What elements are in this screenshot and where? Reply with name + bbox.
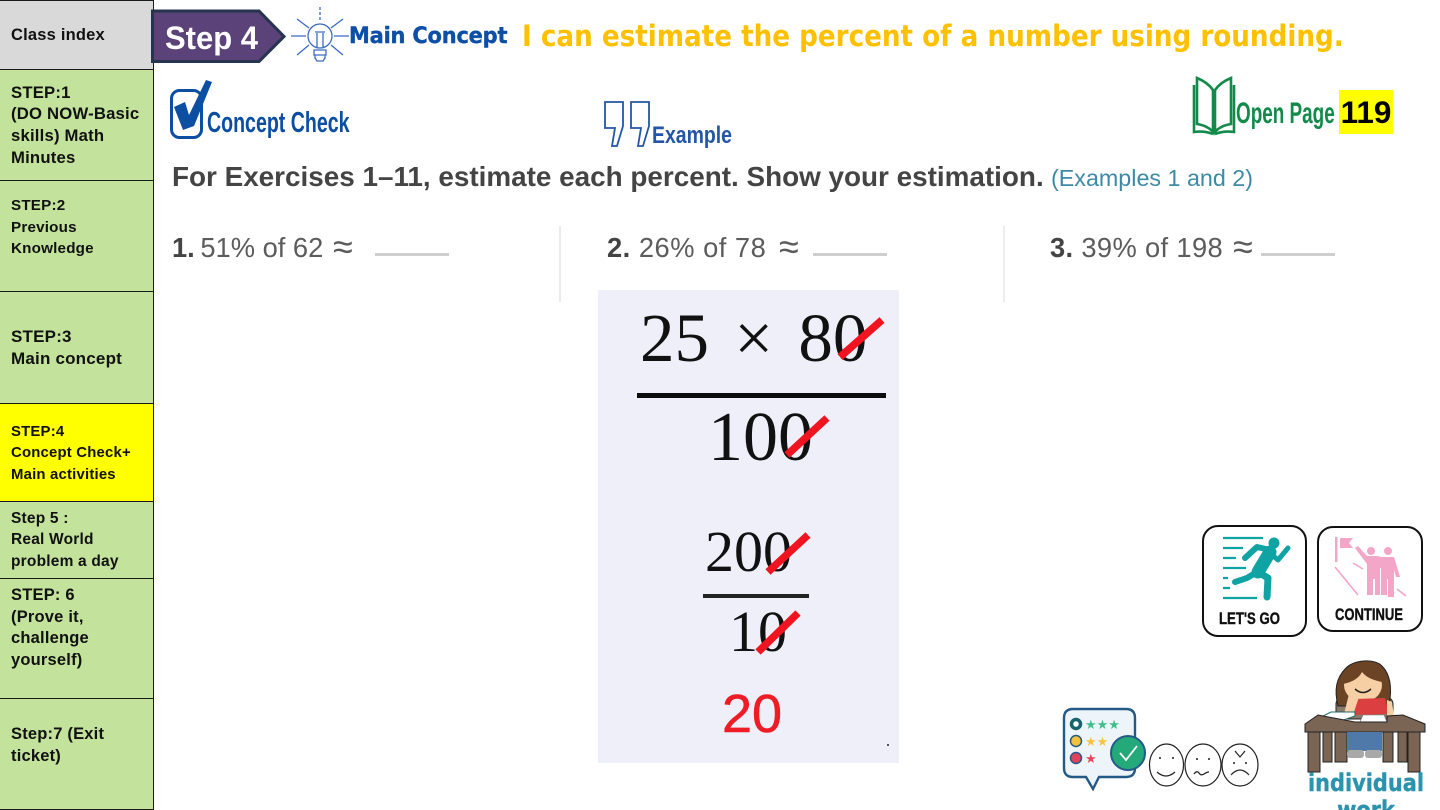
- instruction text: For Exercises 1–11, estimate each percent. Show your estimation.: [172, 161, 1044, 192]
- sidebar cell: step 1: STEP:1: [11, 83, 71, 102]
- sidebar cell: step 2: STEP:2: [11, 197, 65, 214]
- exercise 2: ≈: [779, 226, 799, 267]
- label: individual work: individual: [1308, 769, 1424, 797]
- sidebar cell: step 1: skills) Math: [11, 126, 104, 145]
- sidebar cell: step 7: Step:7 (Exit: [11, 725, 104, 743]
- fraction bar 1: [637, 393, 886, 398]
- icon: rating speech bubble: ★: [1085, 752, 1097, 767]
- badge: step 4: Step 4: [165, 20, 258, 56]
- heading: concept check: Concept Check: [207, 107, 349, 139]
- sidebar cell: step 6: STEP: 6: [11, 586, 75, 604]
- sidebar cell: step 7: [0, 698, 154, 810]
- icon: check box: [170, 80, 212, 139]
- sidebar cell: step 6: [0, 578, 154, 699]
- sidebar cell: step 6: yourself): [11, 651, 82, 669]
- sidebar cell: step 5: Step 5 :: [11, 510, 69, 527]
- numerator: 200: 200: [705, 519, 792, 584]
- button: let's go: LET'S GO: [1219, 609, 1280, 628]
- sidebar cell: step 1: Minutes: [11, 148, 75, 167]
- fraction bar 2: [703, 594, 809, 598]
- page number: 119: 119: [1341, 94, 1391, 130]
- answer: 20: 20: [722, 684, 782, 744]
- heading: example: Example: [652, 122, 732, 149]
- badge: step 4: [151, 10, 286, 63]
- sidebar cell: step 4 active: STEP:4: [11, 424, 64, 440]
- sidebar cell: step 4 active: [0, 403, 154, 502]
- sidebar cell: step 1: (DO NOW-Basic: [11, 104, 139, 123]
- sidebar cell: step 5: problem a day: [11, 553, 119, 570]
- button: continue: CONTINUE: [1335, 605, 1403, 624]
- exercise 2: 2. 26% of 78: [607, 232, 766, 263]
- icon: quotation marks: [604, 101, 650, 147]
- icon: feedback faces: [1148, 743, 1259, 787]
- button: continue: [1317, 526, 1423, 632]
- sidebar cell: step 1: [0, 69, 154, 181]
- label: individual work: [1308, 769, 1424, 810]
- icon: light bulb: [291, 7, 349, 62]
- exercise 1: ≈: [333, 226, 353, 267]
- icon: rating speech bubble: ★★★: [1085, 718, 1120, 733]
- sidebar cell: class index: [0, 0, 154, 70]
- red strike marks: [755, 317, 884, 655]
- numerator: 25 x 80: 25 × 80: [640, 300, 867, 376]
- sidebar cell: step 2: Knowledge: [11, 240, 94, 257]
- sidebar cell: step 6: (Prove it,: [11, 608, 84, 626]
- icon: rating speech bubble: ★★: [1085, 735, 1108, 750]
- sidebar cell: step 2: [0, 180, 154, 292]
- sidebar cell: step 3: Main concept: [11, 348, 122, 368]
- exercise 3: [1050, 226, 1335, 267]
- sidebar cell: step 5: Real World: [11, 531, 94, 548]
- title: learning objective: I can estimate the percent of a number using rounding.: [522, 19, 1344, 53]
- icon: rating speech bubble: [1062, 708, 1146, 791]
- speck: [887, 744, 889, 746]
- example reference: (Examples 1 and 2): [1051, 165, 1253, 191]
- sidebar: lesson steps: [0, 0, 154, 810]
- denominator: 100: 100: [708, 399, 813, 476]
- sidebar cell: step 2: Previous: [11, 219, 77, 236]
- button: let's go: [1202, 525, 1307, 637]
- sidebar cell: step 5: [0, 501, 154, 579]
- denominator: 10: 10: [729, 599, 787, 664]
- sidebar cell: step 6: challenge: [11, 629, 89, 647]
- sidebar cell: step 4 active: Main activities: [11, 467, 116, 483]
- icon: open book: [1192, 76, 1236, 136]
- sidebar cell: step 3: STEP:3: [11, 327, 72, 346]
- exercise 1: [172, 226, 449, 267]
- sidebar cell: step 4 active: Concept Check+: [11, 445, 131, 461]
- heading: open page: Open Page: [1236, 97, 1335, 130]
- worked solution panel: [598, 290, 899, 763]
- illustration: girl at desk: [1304, 660, 1426, 772]
- sidebar cell: class index: Class index: [11, 26, 105, 44]
- sidebar cell: step 3: [0, 291, 154, 404]
- exercise 3: ≈: [1233, 226, 1253, 267]
- heading: main concept: Main Concept: [349, 23, 507, 49]
- exercise 2: [607, 226, 887, 267]
- exercise 3: 3. 39% of 198: [1050, 232, 1223, 263]
- sidebar cell: step 7: ticket): [11, 746, 61, 764]
- exercise 1: 1. 51% of 62: [172, 232, 323, 263]
